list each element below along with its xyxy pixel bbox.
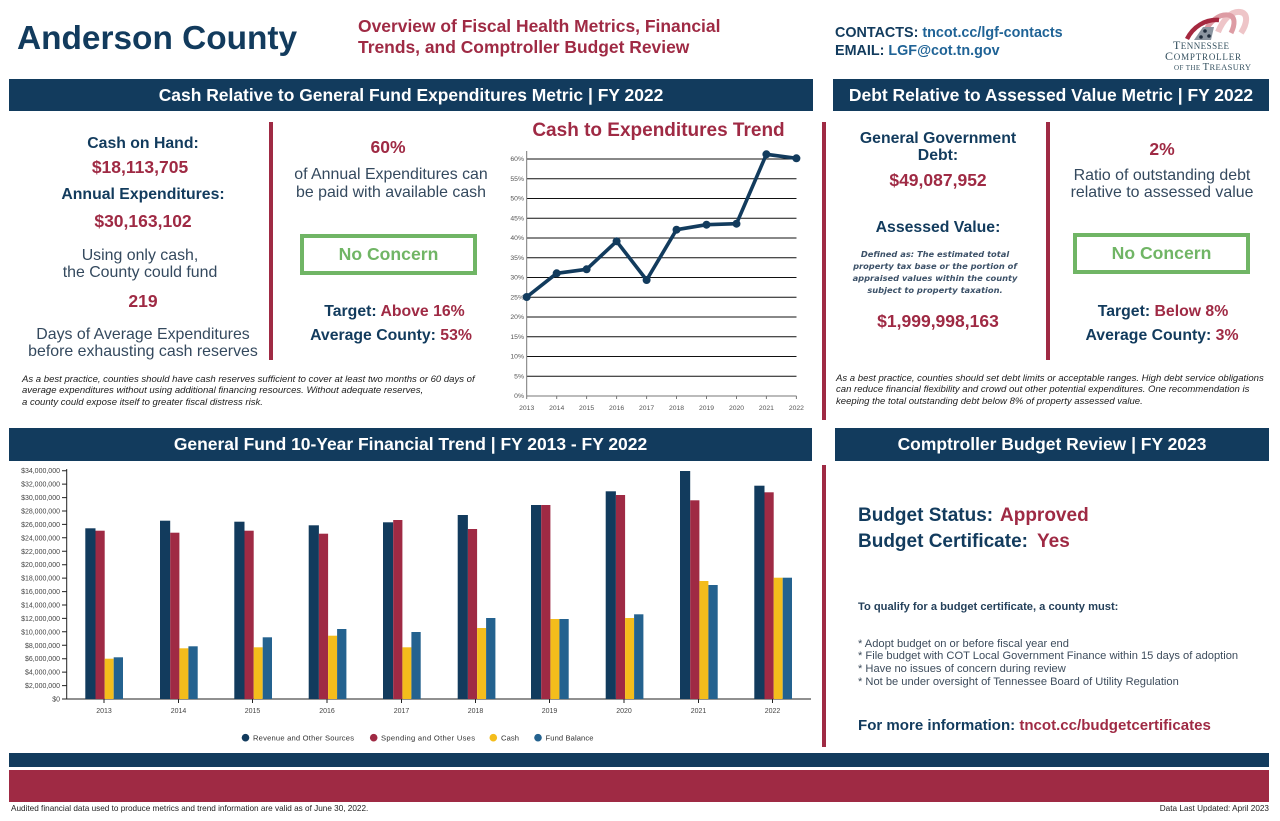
x axis labels: 2016 — [319, 708, 335, 715]
x axis labels: 2019 — [542, 708, 557, 715]
x axis labels: 2018 — [468, 708, 483, 715]
line chart title: Cash to Expenditures Trend — [532, 120, 785, 140]
y axis: $22,000,000 — [21, 549, 60, 556]
assessed value definition: subject to property taxation. — [867, 285, 1003, 295]
note: cash best practice: As a best practice, counties should have cash reserves sufficient to cover at least two months or 60 days of — [22, 374, 475, 385]
debt ratio description: relative to assessed value — [1071, 184, 1253, 201]
line chart: cash to expenditures trend: 45% — [510, 216, 524, 222]
heading: cash metric — [9, 79, 813, 111]
line chart: cash to expenditures trend: 2021 — [759, 405, 774, 412]
certificate requirements list: * Not be under oversight of Tennessee Board of Utility Regulation — [858, 676, 1179, 688]
heading: debt metric: Debt Relative to Assessed Value Metric | FY 2022 — [849, 85, 1253, 105]
subtitle — [358, 16, 720, 57]
y axis: $16,000,000 — [21, 589, 60, 596]
title: Anderson County — [17, 20, 297, 56]
y axis: $28,000,000 — [21, 508, 60, 516]
debt ratio value: 2% — [1149, 139, 1175, 159]
y axis: $8,000,000 — [25, 643, 60, 650]
certificate requirements list: * Have no issues of concern during review — [858, 663, 1066, 675]
y axis: $0 — [52, 696, 60, 704]
debt target: Target: Below 8% — [1098, 303, 1228, 320]
heading: financial trend — [9, 428, 812, 461]
y axis: $30,000,000 — [21, 495, 60, 502]
line chart: cash to expenditures trend: 40% — [510, 235, 524, 242]
status box: cash — [300, 234, 477, 275]
contact details: CONTACTS: tncot.cc/lgf-contacts — [835, 25, 1063, 41]
heading: cash metric: Cash Relative to General Fund Expenditures Metric | FY 2022 — [159, 85, 663, 105]
line chart: cash to expenditures trend: 2013 — [519, 405, 534, 412]
line chart: cash to expenditures trend: 25% — [510, 294, 524, 302]
using only cash text — [63, 247, 217, 281]
target and average: Target: Above 16% — [324, 303, 465, 320]
line chart: cash to expenditures trend: 2016 — [609, 405, 624, 412]
legend — [242, 733, 593, 742]
x axis labels — [96, 708, 780, 715]
ratio description: of Annual Expenditures can — [294, 166, 488, 182]
line chart: cash to expenditures trend: 2020 — [729, 405, 744, 412]
assessed value label: Assessed Value: — [876, 218, 1000, 236]
cash bars — [105, 578, 783, 699]
status box: cash: No Concern — [339, 244, 438, 264]
line chart: cash to expenditures trend: 35% — [510, 255, 524, 262]
line chart: cash to expenditures trend: 10% — [510, 354, 524, 360]
legend: Fund Balance — [546, 733, 594, 742]
ratio description: be paid with available cash — [296, 184, 486, 200]
note: debt best practice: can reduce financial flexibility and crowd out other potential expenditures. One recommendation is — [836, 384, 1249, 395]
x axis labels: 2020 — [616, 708, 632, 715]
more information link: For more information: tncot.cc/budgetcertificates — [858, 717, 1211, 734]
certificate requirements list: * Adopt budget on or before fiscal year end — [858, 638, 1069, 650]
debt ratio description: Ratio of outstanding debt — [1074, 167, 1250, 184]
line chart: cash to expenditures trend — [510, 150, 804, 412]
cash on hand value: $18,113,705 — [92, 157, 188, 177]
line chart: cash to expenditures trend: 2015 — [579, 405, 594, 412]
certificate requirements list: * File budget with COT Local Government Finance within 15 days of adoption — [858, 650, 1238, 662]
budget certificate: Budget Certificate: — [858, 531, 1028, 552]
footnote: audit date: Audited financial data used to produce metrics and trend information are valid as of June 30, 2022. — [11, 804, 368, 813]
budget status: Budget Status: — [858, 505, 993, 526]
certificate requirements list — [858, 638, 1238, 688]
panel: debt ratio — [1071, 139, 1253, 344]
line chart: cash to expenditures trend: 55% — [510, 176, 524, 183]
x axis labels: 2017 — [394, 708, 409, 715]
divider: budget panel — [822, 465, 826, 747]
logo: Tennessee Comptroller of the Treasury: COMPTROLLER — [1165, 49, 1241, 63]
contact details: EMAIL: LGF@cot.tn.gov — [835, 43, 1000, 59]
certificate requirements heading: To qualify for a budget certificate, a county must: — [858, 601, 1118, 613]
subtitle: Trends, and Comptroller Budget Review — [358, 37, 689, 57]
debt average county: Average County: 3% — [1085, 327, 1239, 344]
y axis: $26,000,000 — [21, 522, 60, 529]
x axis labels: 2015 — [245, 708, 260, 715]
x axis labels: 2021 — [691, 708, 706, 715]
cash on hand label: Cash on Hand: — [87, 135, 199, 152]
x axis labels: 2022 — [765, 708, 780, 715]
line chart: cash to expenditures trend: 50% — [510, 196, 524, 202]
y axis: $32,000,000 — [21, 482, 60, 489]
y axis: $4,000,000 — [25, 670, 60, 677]
budget status — [858, 505, 1089, 526]
heading: budget review — [835, 428, 1269, 461]
legend: Spending and Other Uses — [381, 733, 475, 742]
line chart: cash to expenditures trend: 15% — [510, 334, 524, 341]
annual expenditures label: Annual Expenditures: — [61, 186, 225, 203]
y axis: $2,000,000 — [25, 683, 60, 690]
line chart: cash to expenditures trend: 20% — [510, 314, 524, 321]
note: cash best practice: a county could expose itself to greater fiscal distress risk. — [22, 397, 263, 408]
line chart: cash to expenditures trend: 60% — [510, 156, 524, 163]
contact details — [835, 25, 1063, 59]
annual expenditures value: $30,163,102 — [94, 211, 192, 231]
status box: debt — [1073, 233, 1250, 274]
days text: Days of Average Expenditures — [36, 326, 250, 343]
note: cash best practice: average expenditures without using additional financing resources. Without adequate reserves, — [22, 385, 423, 396]
debt ratio description — [1071, 167, 1253, 201]
y axis: $24,000,000 — [21, 535, 60, 542]
using only cash text: the County could fund — [63, 264, 217, 281]
heading: financial trend: General Fund 10-Year Financial Trend | FY 2013 - FY 2022 — [174, 434, 647, 454]
y axis: $10,000,000 — [21, 629, 60, 636]
y axis: $34,000,000 — [21, 468, 60, 475]
subtitle: Overview of Fiscal Health Metrics, Financial — [358, 16, 720, 36]
bar chart: general fund trend — [21, 468, 811, 742]
heading: debt metric — [833, 79, 1269, 111]
status box: debt: No Concern — [1112, 243, 1211, 263]
note: cash best practice — [22, 374, 476, 408]
divider: debt panel left — [822, 122, 826, 420]
note: debt best practice: As a best practice, counties should set debt limits or acceptable ranges. High debt service obligations — [836, 373, 1264, 384]
general government debt label: General Government — [860, 130, 1016, 146]
debt value: $49,087,952 — [889, 170, 987, 190]
legend: Revenue and Other Sources — [253, 733, 354, 742]
line chart: cash to expenditures trend: 5% — [514, 374, 524, 380]
days text — [28, 326, 258, 360]
assessed value definition: property tax base or the portion of — [853, 261, 1017, 271]
line chart: cash to expenditures trend: 2019 — [699, 405, 714, 412]
assessed value definition — [852, 249, 1018, 295]
divider: debt panel inner — [1046, 122, 1050, 360]
y axis: $14,000,000 — [21, 602, 60, 610]
average county: Average County: 53% — [310, 327, 472, 344]
legend: Cash — [501, 733, 519, 742]
ratio description — [294, 166, 488, 200]
panel: budget review: Yes — [1037, 531, 1070, 552]
note: debt best practice — [836, 373, 1264, 407]
ratio value: 60% — [370, 137, 406, 157]
divider: cash panel — [269, 122, 273, 360]
y axis: $6,000,000 — [25, 656, 60, 663]
days text: before exhausting cash reserves — [28, 343, 258, 360]
line chart: cash to expenditures trend: 2018 — [669, 405, 684, 412]
fund balance bars — [114, 578, 792, 699]
y axis: $18,000,000 — [21, 576, 60, 583]
line chart: cash to expenditures trend: 2017 — [639, 405, 654, 412]
assessed value definition: appraised values within the county — [853, 273, 1017, 283]
x axis labels: 2014 — [171, 708, 186, 715]
footer band: navy — [9, 753, 1269, 767]
panel: budget review — [858, 505, 1238, 734]
x axis labels: 2013 — [96, 708, 112, 715]
y axis: $12,000,000 — [21, 616, 60, 623]
spending bars — [96, 492, 774, 699]
y axis: $20,000,000 — [21, 562, 60, 569]
panel: budget review: Approved — [1000, 505, 1089, 526]
line chart: cash to expenditures trend: 2022 — [789, 405, 804, 412]
assessed value amount: $1,999,998,163 — [877, 311, 999, 331]
line chart: cash to expenditures trend: 30% — [510, 274, 524, 282]
heading: budget review: Comptroller Budget Review | FY 2023 — [898, 434, 1206, 454]
panel: cash ratio — [294, 137, 488, 344]
logo: Tennessee Comptroller of the Treasury: OF THE TREASURY — [1174, 62, 1251, 73]
panel: cash amounts — [28, 135, 258, 360]
line chart: cash to expenditures trend: 0% — [514, 393, 524, 400]
revenue bars — [85, 471, 765, 699]
note: debt best practice: keeping the total outstanding debt below 8% of property assessed value. — [836, 396, 1143, 407]
days value: 219 — [128, 291, 158, 311]
general government debt label: Debt: — [918, 147, 958, 164]
general government debt label — [860, 130, 1016, 164]
footnote: last updated: Data Last Updated: April 2023 — [1160, 804, 1269, 813]
y axis — [21, 468, 811, 704]
using only cash text: Using only cash, — [82, 247, 198, 264]
assessed value definition: Defined as: The estimated total — [861, 249, 1009, 259]
logo: Tennessee Comptroller of the Treasury — [1165, 8, 1251, 73]
logo: Tennessee Comptroller of the Treasury: TENNESSEE — [1173, 38, 1230, 52]
footer band: red — [9, 770, 1269, 802]
line chart: cash to expenditures trend: 2014 — [549, 405, 564, 412]
panel: debt amounts — [852, 130, 1018, 331]
